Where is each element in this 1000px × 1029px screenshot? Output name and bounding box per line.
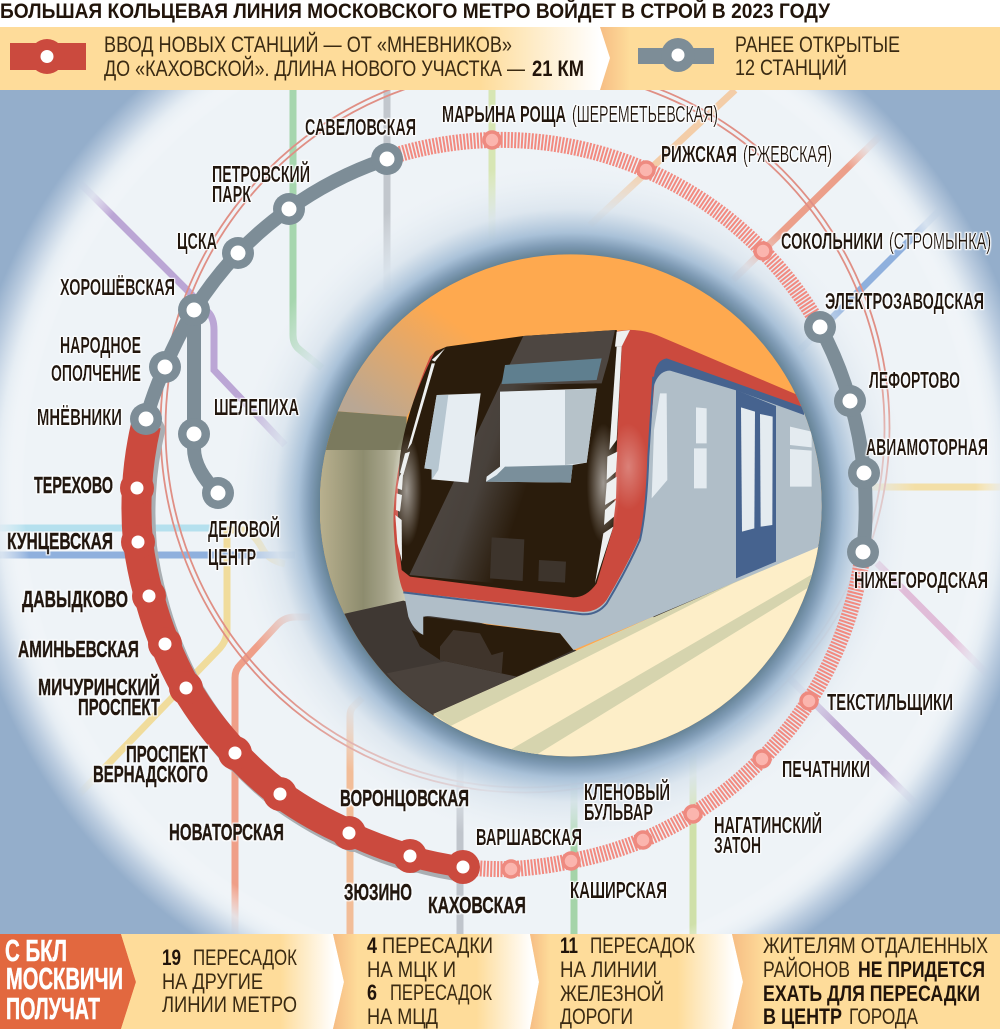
label: Деловой центр xyxy=(208,515,280,570)
panel: MCC and MCD transfers: 6 xyxy=(367,980,377,1005)
label: Каширская: КАШИРСКАЯ xyxy=(570,877,667,903)
grey line: previously opened section xyxy=(130,143,880,568)
legend text: opened stations: 12 СТАНЦИЙ xyxy=(735,55,847,80)
label: Савеловская: САВЕЛОВСКАЯ xyxy=(305,114,416,140)
panel: intro arrow: С БКЛ xyxy=(5,933,67,968)
train illustration xyxy=(320,250,823,783)
label: Печатники: ПЕЧАТНИКИ xyxy=(782,756,870,782)
label: Нагатинский затон: ЗАТОН xyxy=(714,832,761,858)
legend text: opened stations xyxy=(735,32,900,80)
panel: MCC and MCD transfers: НА МЦД xyxy=(367,1004,438,1029)
panel: intro arrow: МОСКВИЧИ xyxy=(6,961,123,996)
label: ЦСКА: ЦСКА xyxy=(177,228,217,254)
red line: new section xyxy=(136,425,463,867)
label: Народное ополчение: ОПОЛЧЕНИЕ xyxy=(51,360,141,386)
label: Петровский парк: ПАРК xyxy=(212,181,252,207)
legend text: new stations: ДО «КАХОВСКОЙ». ДЛИНА НОВОГО УЧАСТКА — xyxy=(104,56,525,81)
panel: MCC and MCD transfers: 4 xyxy=(367,933,378,958)
panel: intro arrow: ПОЛУЧАТ xyxy=(6,991,100,1026)
label: Терехово: ТЕРЕХОВО xyxy=(34,472,113,498)
label: Проспект Вернадского: ВЕРНАДСКОГО xyxy=(93,761,208,787)
label: Варшавская: ВАРШАВСКАЯ xyxy=(476,824,582,850)
opened west section: red line shadow xyxy=(140,430,467,872)
label: Народное ополчение: НАРОДНОЕ xyxy=(60,332,141,358)
stations under construction xyxy=(484,132,817,877)
label: Кленовый бульвар xyxy=(584,778,670,825)
label: Народное ополчение xyxy=(51,332,141,386)
panel: MCC and MCD transfers: ПЕРЕСАДКИ xyxy=(382,933,493,958)
label: Нагатинский затон xyxy=(714,811,822,858)
red stations xyxy=(120,471,480,884)
undercarriage xyxy=(412,617,573,677)
label: Хорошёвская: ХОРОШЁВСКАЯ xyxy=(60,274,175,300)
panel: 19 transfers: ЛИНИИ МЕТРО xyxy=(162,992,297,1017)
panel: railway transfers: 11 xyxy=(560,933,578,958)
label: Кунцевская: КУНЦЕВСКАЯ xyxy=(7,528,113,554)
icon: red line segment xyxy=(10,39,86,74)
side windows and door xyxy=(652,390,812,578)
panel: MCC and MCD transfers: НА МЦК И xyxy=(367,957,456,982)
panel: intro arrow xyxy=(0,933,136,1029)
panel: no need to travel to centre: РАЙОНОВ xyxy=(763,957,850,982)
panel: 19 transfers: 19 xyxy=(162,945,181,970)
cab front xyxy=(398,330,622,597)
label: Мичуринский проспект: МИЧУРИНСКИЙ xyxy=(38,673,160,700)
label: Кленовый бульвар: КЛЕНОВЫЙ xyxy=(584,778,670,805)
icon: grey line segment xyxy=(638,38,714,72)
label: Воронцовская: ВОРОНЦОВСКАЯ xyxy=(340,785,469,811)
station labels xyxy=(7,101,991,918)
bottom benefits bar xyxy=(0,933,1000,1029)
existing circle line ring xyxy=(160,64,890,792)
label: Рижская: (РЖЕВСКАЯ) xyxy=(743,141,832,167)
label: Давыдково: ДАВЫДКОВО xyxy=(22,586,128,612)
label: Марьина Роща: (ШЕРЕМЕТЬЕВСКАЯ) xyxy=(572,101,718,127)
label: Мичуринский проспект xyxy=(38,673,160,720)
panel: no need to travel to centre: В ЦЕНТР xyxy=(763,1004,842,1029)
label: Мнёвники: МНЁВНИКИ xyxy=(37,404,122,430)
panel: railway transfers: ПЕРЕСАДОК xyxy=(590,933,695,958)
label: Петровский парк xyxy=(212,160,310,207)
legend text: new stations xyxy=(104,32,584,81)
train body xyxy=(393,330,823,650)
new section under construction: striped rail xyxy=(387,140,863,869)
label: Мичуринский проспект: ПРОСПЕКТ xyxy=(78,694,160,720)
label: Кленовый бульвар: БУЛЬВАР xyxy=(584,799,653,825)
headlights xyxy=(392,330,630,583)
panel: railway transfers: НА ЛИНИИ xyxy=(560,957,657,982)
label: Рижская xyxy=(661,141,832,167)
label: Деловой центр: ДЕЛОВОЙ xyxy=(208,515,280,542)
label: Аминьевская: АМИНЬЕВСКАЯ xyxy=(18,636,139,662)
label: Проспект Вернадского xyxy=(93,741,208,787)
tunnel wall xyxy=(320,250,823,760)
label: Зюзино: ЗЮЗИНО xyxy=(344,879,412,905)
panel: 19 transfers: ПЕРЕСАДОК xyxy=(193,945,297,970)
panel: 19 transfers: НА ДРУГИЕ xyxy=(162,969,263,994)
panel: railway transfers: ДОРОГИ xyxy=(560,1004,633,1029)
label: Каховская: КАХОВСКАЯ xyxy=(428,892,526,918)
panel: MCC and MCD transfers: ПЕРЕСАДОК xyxy=(390,980,492,1005)
title: БОЛЬШАЯ КОЛЬЦЕВАЯ ЛИНИЯ МОСКОВСКОГО МЕТРО ВОЙДЕТ В СТРОЙ В 2023 ГОДУ xyxy=(0,0,831,23)
legend text: new stations: ВВОД НОВЫХ СТАНЦИЙ — ОТ «МНЕВНИКОВ» xyxy=(104,32,512,57)
label: Деловой центр: ЦЕНТР xyxy=(208,544,256,570)
panel: railway transfers xyxy=(530,933,743,1029)
legend text: new stations: 21 КМ xyxy=(532,56,584,81)
label: Шелепиха: ШЕЛЕПИХА xyxy=(214,394,299,420)
label: Проспект Вернадского: ПРОСПЕКТ xyxy=(126,741,208,767)
panel: railway transfers: ЖЕЛЕЗНОЙ xyxy=(560,981,664,1006)
platform xyxy=(433,544,819,756)
label: Петровский парк: ПЕТРОВСКИЙ xyxy=(212,160,310,187)
label: Марьина Роща: МАРЬИНА РОЩА xyxy=(442,101,566,127)
legend text: opened stations: РАНЕЕ ОТКРЫТЫЕ xyxy=(735,32,900,57)
label: Новаторская: НОВАТОРСКАЯ xyxy=(169,819,284,845)
label: Нагатинский затон: НАГАТИНСКИЙ xyxy=(714,811,822,838)
label: Сокольники: СОКОЛЬНИКИ xyxy=(781,228,883,254)
legend banner xyxy=(0,27,1000,90)
panel: no need to travel to centre xyxy=(732,933,1000,1029)
tunnel halo xyxy=(226,160,916,850)
panel: 19 transfers xyxy=(121,934,344,1029)
panel: no need to travel to centre: ГОРОДА xyxy=(849,1004,918,1029)
panel: MCC and MCD transfers xyxy=(333,933,539,1029)
label: Рижская: РИЖСКАЯ xyxy=(661,141,737,167)
